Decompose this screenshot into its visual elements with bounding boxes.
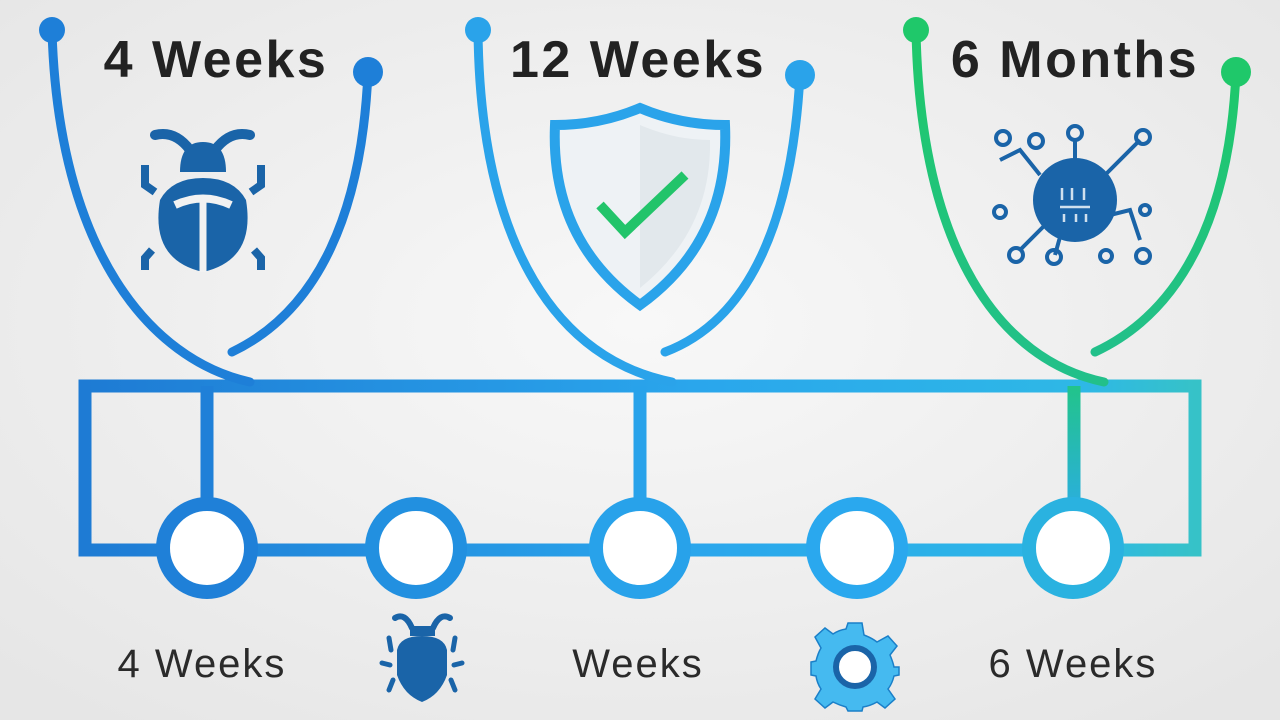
U-curve 1 [39, 17, 383, 382]
U-curve 3 [903, 17, 1251, 382]
label: 6 Weeks: 6 Weeks [989, 642, 1157, 686]
title: 12 Weeks: 12 Weeks [510, 31, 766, 89]
icon: shield with check [555, 108, 725, 305]
title: 4 Weeks: 4 Weeks [104, 31, 328, 89]
U-curve 2 [465, 17, 815, 382]
icon: gear [811, 623, 899, 711]
label: Weeks: Weeks [572, 642, 704, 686]
timeline nodes [163, 504, 1117, 592]
icon: bug [145, 134, 261, 272]
icon: chip network [994, 126, 1150, 264]
title: 6 Months: 6 Months [951, 31, 1199, 89]
icon: small bug [382, 616, 462, 702]
frame: timeline bracket [85, 386, 1195, 550]
label: 4 Weeks: 4 Weeks [118, 642, 286, 686]
